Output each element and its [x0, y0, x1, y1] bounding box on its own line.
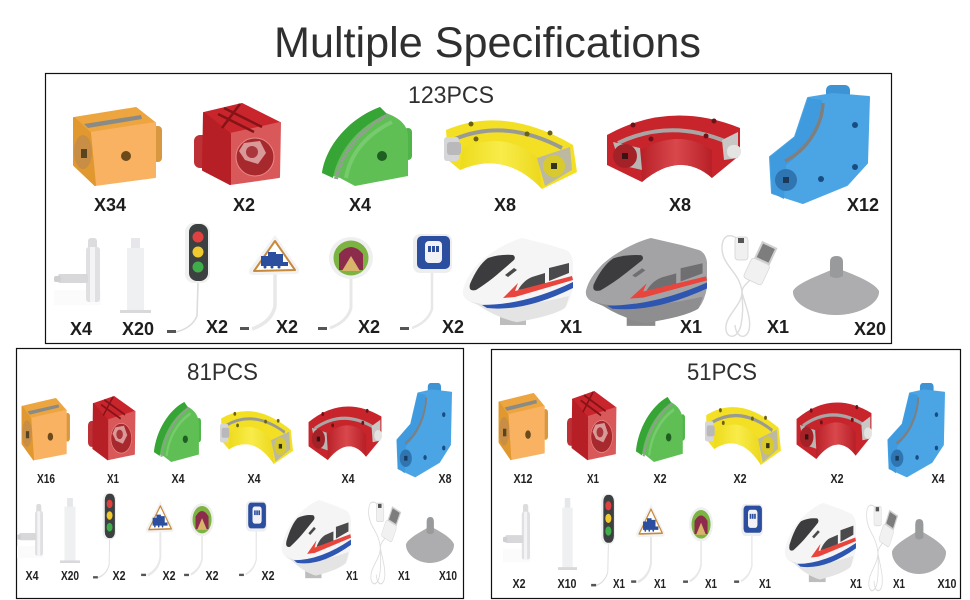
part: grey train [586, 238, 707, 326]
part: orange block [22, 399, 70, 460]
part: traffic light [93, 493, 116, 578]
panel: 51PCS set [492, 350, 960, 598]
quantity labels: X1 [850, 576, 862, 591]
quantity labels: X1 [680, 317, 702, 337]
quantity labels: X1 [398, 568, 410, 583]
quantity labels: X2 [830, 471, 844, 486]
part: yellow arc [444, 120, 577, 189]
quantity labels: X4 [248, 471, 261, 486]
quantity labels: X10 [938, 576, 956, 591]
part: USB cable [867, 505, 899, 591]
part: triangle train sign [240, 235, 299, 330]
quantity labels: X2 [654, 471, 666, 486]
part: triangle train sign [141, 501, 174, 576]
quantity labels: X1 [654, 576, 666, 591]
quantity labels [26, 471, 457, 583]
quantity labels: X8 [438, 471, 452, 486]
quantity labels: X2 [206, 568, 218, 583]
quantity labels: X4 [26, 568, 39, 583]
quantity labels: X2 [358, 317, 380, 337]
quantity labels: X20 [854, 319, 886, 339]
quantity labels: X2 [734, 471, 746, 486]
quantity labels: X2 [233, 195, 255, 215]
part: traffic light [167, 223, 210, 333]
quantity labels: X8 [494, 195, 516, 215]
part: white train [785, 503, 856, 582]
part: square tram sign [239, 501, 267, 576]
part: red cube [194, 104, 280, 184]
quantity labels: X12 [847, 195, 879, 215]
quantity labels: X2 [442, 317, 464, 337]
part: suction cup [793, 256, 879, 315]
part: USB cable [369, 502, 402, 584]
quantity labels: X16 [37, 471, 55, 486]
quantity labels: X34 [94, 195, 126, 215]
part: green curve [636, 397, 685, 462]
quantity labels: X4 [70, 319, 92, 339]
quantity labels: X20 [61, 568, 79, 583]
quantity labels: X2 [512, 576, 526, 591]
part: suction cup [406, 517, 454, 563]
part: blue ramp [397, 383, 451, 476]
part: yellow arc [220, 411, 293, 464]
quantity labels: X2 [162, 568, 176, 583]
part: post [60, 498, 80, 563]
part: blue ramp [888, 383, 944, 476]
quantity labels [70, 195, 886, 339]
part: yellow arc [705, 407, 781, 465]
part: post [558, 498, 577, 570]
title: Multiple Specifications [274, 19, 701, 67]
part: red cube [88, 397, 135, 459]
part: blue ramp [770, 85, 869, 203]
heading: 81PCS: 81PCS [187, 359, 258, 386]
part: T connector [503, 504, 531, 562]
part: suction cup [892, 519, 946, 574]
part: T connector [54, 238, 101, 305]
quantity labels: X1 [613, 576, 625, 591]
part: green curve [154, 402, 201, 462]
quantity labels: X4 [342, 471, 355, 486]
part: square tram sign [734, 504, 763, 583]
quantity labels: X1 [705, 576, 717, 591]
quantity labels: X1 [346, 568, 358, 583]
part: red arc [309, 406, 382, 460]
part: USB cable [722, 236, 778, 336]
quantity labels: X8 [669, 195, 691, 215]
quantity labels [512, 471, 956, 591]
heading: 51PCS: 51PCS [687, 359, 757, 386]
part: triangle train sign [631, 504, 665, 583]
quantity labels: X2 [112, 568, 126, 583]
quantity labels: X2 [276, 317, 298, 337]
part: round tunnel sign [184, 503, 214, 576]
part: green curve [322, 107, 412, 186]
quantity labels: X1 [587, 471, 599, 486]
quantity labels: X20 [122, 319, 154, 339]
part: square tram sign [400, 234, 452, 330]
quantity labels: X2 [262, 568, 274, 583]
quantity labels: X10 [439, 568, 457, 583]
quantity labels: X2 [206, 317, 228, 337]
quantity labels: X4 [172, 471, 185, 486]
part: round tunnel sign [318, 237, 373, 330]
part: red arc [797, 402, 872, 459]
quantity labels: X4 [932, 471, 945, 486]
quantity labels: X1 [560, 317, 582, 337]
part: red cube [567, 392, 616, 459]
part: white train [463, 238, 573, 325]
part: orange block [499, 394, 548, 459]
quantity labels: X1 [893, 576, 905, 591]
quantity labels: X10 [558, 576, 576, 591]
heading: 123PCS: 123PCS [408, 82, 494, 109]
part: traffic light [591, 494, 615, 586]
part: orange block [74, 108, 162, 185]
quantity labels: X1 [767, 317, 789, 337]
quantity labels: X1 [759, 576, 771, 591]
panel: 81PCS set [16, 348, 464, 598]
quantity labels: X1 [107, 471, 119, 486]
panel: 123PCS set [46, 74, 892, 344]
part: round tunnel sign [683, 507, 713, 583]
part: T connector [17, 504, 44, 558]
part: post [120, 238, 151, 313]
quantity labels: X4 [349, 195, 371, 215]
part: white train [282, 500, 351, 578]
part: red arc [607, 116, 741, 182]
quantity labels: X12 [514, 471, 532, 486]
